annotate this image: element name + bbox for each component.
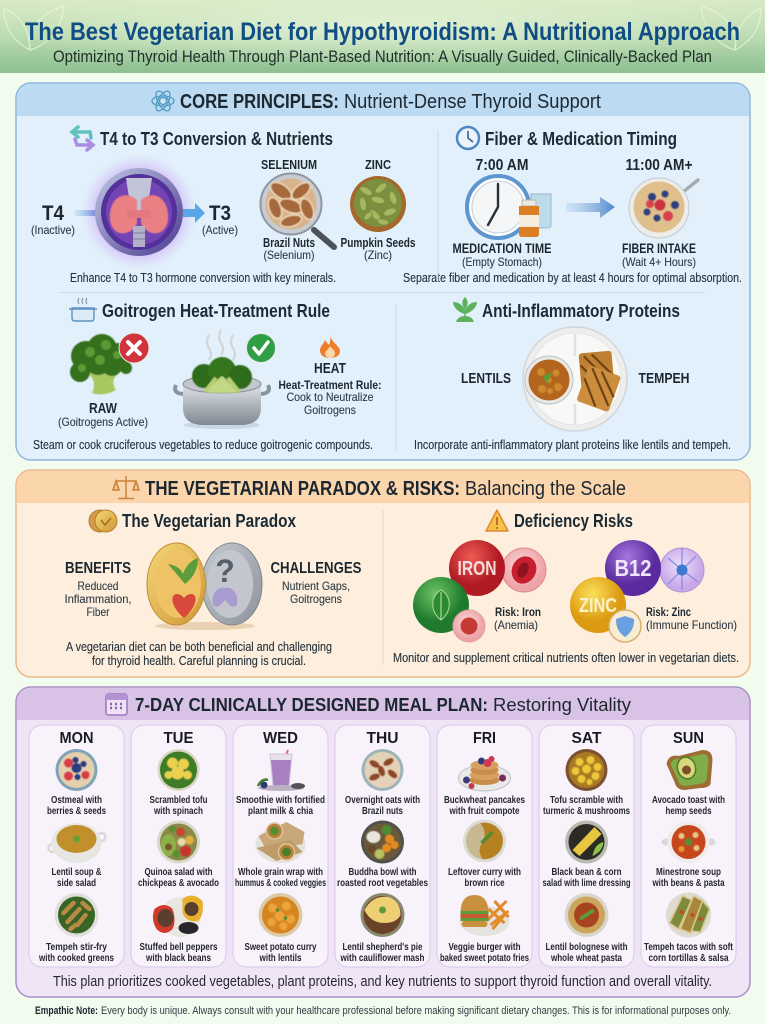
card: wednesday xyxy=(233,725,328,967)
heading: core principles: CORE PRINCIPLES: xyxy=(180,91,339,113)
text: minestrone: Minestrone soup xyxy=(656,867,721,878)
icon: magnifier with brazil nuts xyxy=(260,174,334,247)
fiber intake xyxy=(622,157,698,269)
icon: overnight oats xyxy=(362,749,404,791)
text: oatmeal: Ostmeal with xyxy=(51,795,102,806)
icon: broccoli xyxy=(70,334,132,394)
heat label xyxy=(278,335,382,417)
text: pancakes: with fruit compote xyxy=(449,806,520,817)
icon: steam xyxy=(207,330,235,360)
selenium: brazil nuts: Brazil Nuts xyxy=(263,236,315,250)
text: pancakes xyxy=(444,795,525,817)
text: bean salad: Black bean & corn xyxy=(552,867,622,878)
text: leftover curry: Leftover curry with xyxy=(448,867,521,878)
label: T4 xyxy=(31,202,75,237)
text: tofu: with spinach xyxy=(153,806,203,817)
icon: lentil bolognese xyxy=(564,893,608,937)
label: T3: T3 xyxy=(209,202,231,225)
text: peppers xyxy=(140,942,218,964)
icon: red cross badge xyxy=(119,333,149,363)
benefits: Reduced xyxy=(78,579,118,593)
card: friday xyxy=(437,725,532,967)
label: T4: (Inactive) xyxy=(31,223,75,237)
text: smoothie xyxy=(236,795,325,817)
text: lentil soup xyxy=(52,867,102,889)
icon: cooking pot small xyxy=(69,298,97,321)
challenges xyxy=(270,560,362,606)
card: saturday: SAT xyxy=(572,730,602,747)
text: tempeh stir-fry: with cooked greens xyxy=(38,953,114,964)
icon: curry with rice xyxy=(463,820,506,862)
text: tofu scramble: turmeric & mushrooms xyxy=(543,806,630,817)
icon: lentil soup xyxy=(48,823,106,863)
text: leftover curry xyxy=(448,867,521,889)
heading: goitrogen rule: Goitrogen Heat-Treatment Rule xyxy=(102,301,330,321)
text: veggie burger xyxy=(440,942,529,964)
label: tempeh: TEMPEH xyxy=(638,370,690,387)
icon: clock, bottle and water xyxy=(467,176,551,238)
card: sunday xyxy=(641,725,736,967)
arrow: timing xyxy=(566,197,615,218)
text: tofu scramble: Tofu scramble with xyxy=(550,795,623,806)
text: buddha bowl xyxy=(337,867,428,889)
heat label: Goitrogens xyxy=(304,403,356,417)
challenges: Goitrogens xyxy=(290,592,342,606)
card: tuesday xyxy=(131,725,226,967)
icon: atom xyxy=(152,89,174,113)
benefits: Fiber xyxy=(86,605,110,619)
icon: oatmeal bowl xyxy=(629,178,698,238)
label: lentils: LENTILS xyxy=(461,370,511,387)
icon: quinoa salad xyxy=(157,820,200,864)
card: tuesday: TUE xyxy=(164,730,194,747)
subtitle: Optimizing Thyroid Health Through Plant-Based Nutrition: A Visually Guided, Clinically-Backed Plan xyxy=(53,48,712,66)
text: shepherd's pie: with cauliflower mash xyxy=(340,953,424,964)
icon: bowl of pumpkin seeds xyxy=(350,176,406,232)
heading: core principles xyxy=(180,91,601,113)
icon: green check badge xyxy=(246,334,276,362)
icon: minestrone soup xyxy=(662,821,716,863)
icon: warning xyxy=(486,510,508,531)
icon: clock small xyxy=(457,127,479,149)
raw broccoli xyxy=(58,333,149,429)
card: monday: MON xyxy=(60,730,94,747)
text: wrap: hummus & cooked veggies xyxy=(235,878,326,889)
medication time: (Empty Stomach) xyxy=(462,255,542,269)
icon: B12 ball: B12 xyxy=(614,555,652,581)
text: leftover curry: brown rice xyxy=(464,878,505,889)
benefits: BENEFITS xyxy=(65,560,131,577)
icon: smoothie xyxy=(258,750,305,791)
card: friday: FRI xyxy=(473,730,496,747)
text: tempeh stir-fry xyxy=(38,942,114,964)
text: oatmeal: berries & seeds xyxy=(47,806,106,817)
iron risk: (Anemia) xyxy=(494,618,538,632)
icon: spinach ball xyxy=(413,577,469,633)
text: pancakes: Buckwheat pancakes xyxy=(444,795,525,806)
icon: black bean and corn salad xyxy=(565,820,608,864)
text: avocado toast: hemp seeds xyxy=(666,806,712,817)
caption: T4 to T3: Enhance T4 to T3 hormone conversion with key minerals. xyxy=(70,271,336,285)
text: tacos: corn tortillas & salsa xyxy=(648,953,729,964)
icon: tofu with spinach xyxy=(158,749,200,791)
caption: paradox xyxy=(66,640,332,668)
empathic note: Empathic Note: xyxy=(35,1005,98,1017)
arrow: T3 out xyxy=(183,203,205,223)
text: curry: Sweet potato curry xyxy=(244,942,317,953)
text: tacos xyxy=(644,942,733,964)
text: avocado toast xyxy=(652,795,725,817)
icon: plant xyxy=(453,297,477,322)
heading: paradox: Balancing the Scale xyxy=(465,478,626,500)
text: tofu scramble xyxy=(543,795,630,817)
text: veggie burger: baked sweet potato fries xyxy=(440,953,529,964)
heading: fiber timing: Fiber & Medication Timing xyxy=(485,129,677,149)
text: quinoa xyxy=(138,867,219,889)
text: buddha bowl: roasted root vegetables xyxy=(337,878,428,889)
text: curry xyxy=(244,942,317,964)
label: T3 xyxy=(202,202,238,237)
icon: red blood cell xyxy=(502,548,546,592)
text: quinoa: chickpeas & avocado xyxy=(138,878,219,889)
header banner xyxy=(0,0,765,73)
text: overnight oats: Brazil nuts xyxy=(362,806,403,817)
icon: tempeh stir-fry xyxy=(54,893,98,937)
text: tofu: Scrambled tofu xyxy=(150,795,208,806)
text: lentil soup: Lentil soup & xyxy=(52,867,102,878)
text: minestrone xyxy=(652,867,725,889)
zinc: pumpkin seeds xyxy=(340,158,416,262)
arrow: T4 in xyxy=(75,210,98,216)
card: thursday: THU xyxy=(366,730,398,747)
card: monday xyxy=(29,725,124,967)
text: curry: with lentils xyxy=(259,953,302,964)
heat label: Heat-Treatment Rule: xyxy=(278,378,382,392)
icon: conversion arrows xyxy=(72,127,93,150)
icon: shield ball xyxy=(609,610,641,642)
text: minestrone: with beans & pasta xyxy=(652,878,725,889)
icon: wraps xyxy=(256,822,306,863)
card: saturday xyxy=(539,725,634,967)
heading: meal plan: 7-DAY CLINICALLY DESIGNED MEAL PLAN: xyxy=(135,695,488,715)
iron risk: Risk: Iron xyxy=(495,605,541,619)
icon: B12 ball xyxy=(605,540,661,596)
icon: flame xyxy=(320,335,340,358)
icon: stuffed peppers xyxy=(153,895,203,937)
icon: zinc ball: ZINC xyxy=(579,595,617,617)
text: bean salad: salad with lime dressing xyxy=(542,878,630,889)
text: overnight oats xyxy=(345,795,420,817)
heading: deficiency risks: Deficiency Risks xyxy=(514,511,633,531)
icon: neuron ball xyxy=(660,548,704,592)
heading: the vegetarian paradox: The Vegetarian Paradox xyxy=(122,511,296,531)
icon: tofu scramble xyxy=(566,749,608,791)
text: avocado toast: Avocado toast with xyxy=(652,795,725,806)
caption: paradox: A vegetarian diet can be both beneficial and challenging xyxy=(66,640,332,654)
thyroid conversion diagram xyxy=(31,154,238,270)
zinc and b12 risk: (Immune Function) xyxy=(646,618,737,632)
icon: pot of broccoli xyxy=(175,357,269,429)
fiber intake: FIBER INTAKE xyxy=(622,241,696,256)
text: quinoa: Quinoa salad with xyxy=(144,867,212,878)
zinc: pumpkin seeds: ZINC xyxy=(365,158,391,172)
heading: meal plan: Restoring Vitality xyxy=(493,695,631,715)
icon: two-sided coin: ? xyxy=(215,553,235,589)
selenium: brazil nuts xyxy=(260,158,334,262)
selenium: brazil nuts: (Selenium) xyxy=(264,248,314,262)
text: peppers: Stuffed bell peppers xyxy=(140,942,218,953)
caption: goitrogen: Steam or cook cruciferous vegetables to reduce goitrogenic compounds. xyxy=(33,438,373,452)
icon: buddha bowl xyxy=(361,820,404,864)
text: peppers: with black beans xyxy=(145,953,211,964)
icon: veggie burger and fries xyxy=(460,895,510,936)
text: tofu xyxy=(150,795,208,817)
heading: T4 to T3: T4 to T3 Conversion & Nutrients xyxy=(100,129,333,149)
raw broccoli: (Goitrogens Active) xyxy=(58,415,148,429)
icon: divided plate with lentils and tempeh xyxy=(523,327,627,431)
icon: iron ball: IRON xyxy=(458,558,496,580)
text: tempeh stir-fry: Tempeh stir-fry xyxy=(46,942,107,953)
panel: vegetarian paradox and risks xyxy=(16,470,750,677)
text: wrap xyxy=(235,867,326,889)
text: bean salad xyxy=(542,867,630,889)
heat label: Cook to Neutralize xyxy=(286,390,374,404)
icon: shepherd's pie xyxy=(360,893,404,937)
heading: core principles: Nutrient-Dense Thyroid Support xyxy=(344,91,601,113)
raw broccoli: RAW xyxy=(89,400,118,417)
text: smoothie: Smoothie with fortified xyxy=(236,795,325,806)
label: T3: (Active) xyxy=(202,223,238,237)
label: T4: T4 xyxy=(42,202,64,225)
icon: small coins xyxy=(89,510,117,532)
text: buddha bowl: Buddha bowl with xyxy=(348,867,416,878)
cooked broccoli in pot xyxy=(175,330,276,429)
text: overnight oats: Overnight oats with xyxy=(345,795,420,806)
selenium: brazil nuts: SELENIUM xyxy=(261,158,317,172)
text: bolognese: Lentil bolognese with xyxy=(546,942,628,953)
icon: avocado toast xyxy=(666,750,712,790)
text: oatmeal xyxy=(47,795,106,817)
text: shepherd's pie xyxy=(340,942,424,964)
text: bolognese: whole wheat pasta xyxy=(550,953,622,964)
challenges: CHALLENGES xyxy=(270,560,362,577)
text: veggie burger: Veggie burger with xyxy=(448,942,520,953)
icon: two-sided coin xyxy=(147,543,262,630)
zinc and b12 risk: Risk: Zinc xyxy=(646,605,691,619)
card: thursday xyxy=(335,725,430,967)
icon: red meat ball xyxy=(453,610,485,642)
text: tacos: Tempeh tacos with soft xyxy=(644,942,733,953)
medication time: MEDICATION TIME xyxy=(452,241,552,256)
zinc and b12 risk xyxy=(570,540,737,642)
caption: paradox: for thyroid health. Careful planning is crucial. xyxy=(92,654,306,668)
medication time: 7:00 AM xyxy=(476,157,528,174)
icon: tempeh tacos xyxy=(666,892,711,938)
card: sunday: SUN xyxy=(673,730,704,747)
benefits xyxy=(64,560,132,619)
icon: calendar xyxy=(106,694,127,715)
fiber intake: (Wait 4+ Hours) xyxy=(622,255,696,269)
challenges: Nutrient Gaps, xyxy=(282,579,350,593)
card: wednesday: WED xyxy=(263,730,298,747)
panel: core principles xyxy=(16,83,750,460)
zinc: pumpkin seeds: (Zinc) xyxy=(364,248,392,262)
text: smoothie: plant milk & chia xyxy=(248,806,313,817)
icon: sweet potato curry xyxy=(258,893,302,937)
heading: paradox: THE VEGETARIAN PARADOX & RISKS: xyxy=(145,478,460,500)
zinc: pumpkin seeds: Pumpkin Seeds xyxy=(340,236,416,250)
heading: anti-inflammatory: Anti-Inflammatory Proteins xyxy=(482,301,680,321)
icon: zinc ball xyxy=(570,577,626,633)
medication time xyxy=(452,157,552,269)
panel: meal plan xyxy=(16,687,750,997)
icon: oatmeal with berries xyxy=(56,749,98,791)
icon: scales xyxy=(113,476,139,498)
fiber intake: 11:00 AM+ xyxy=(626,157,692,174)
text: bolognese xyxy=(546,942,628,964)
benefits: Inflammation, xyxy=(64,592,132,606)
heat label: HEAT xyxy=(314,360,346,377)
text: wrap: Whole grain wrap with xyxy=(238,867,323,878)
icon: thyroid orb xyxy=(81,154,197,270)
icon: buckwheat pancakes xyxy=(458,756,510,791)
text: shepherd's pie: Lentil shepherd's pie xyxy=(342,942,423,953)
text: lentil soup: side salad xyxy=(57,878,96,889)
iron risk xyxy=(413,540,546,642)
